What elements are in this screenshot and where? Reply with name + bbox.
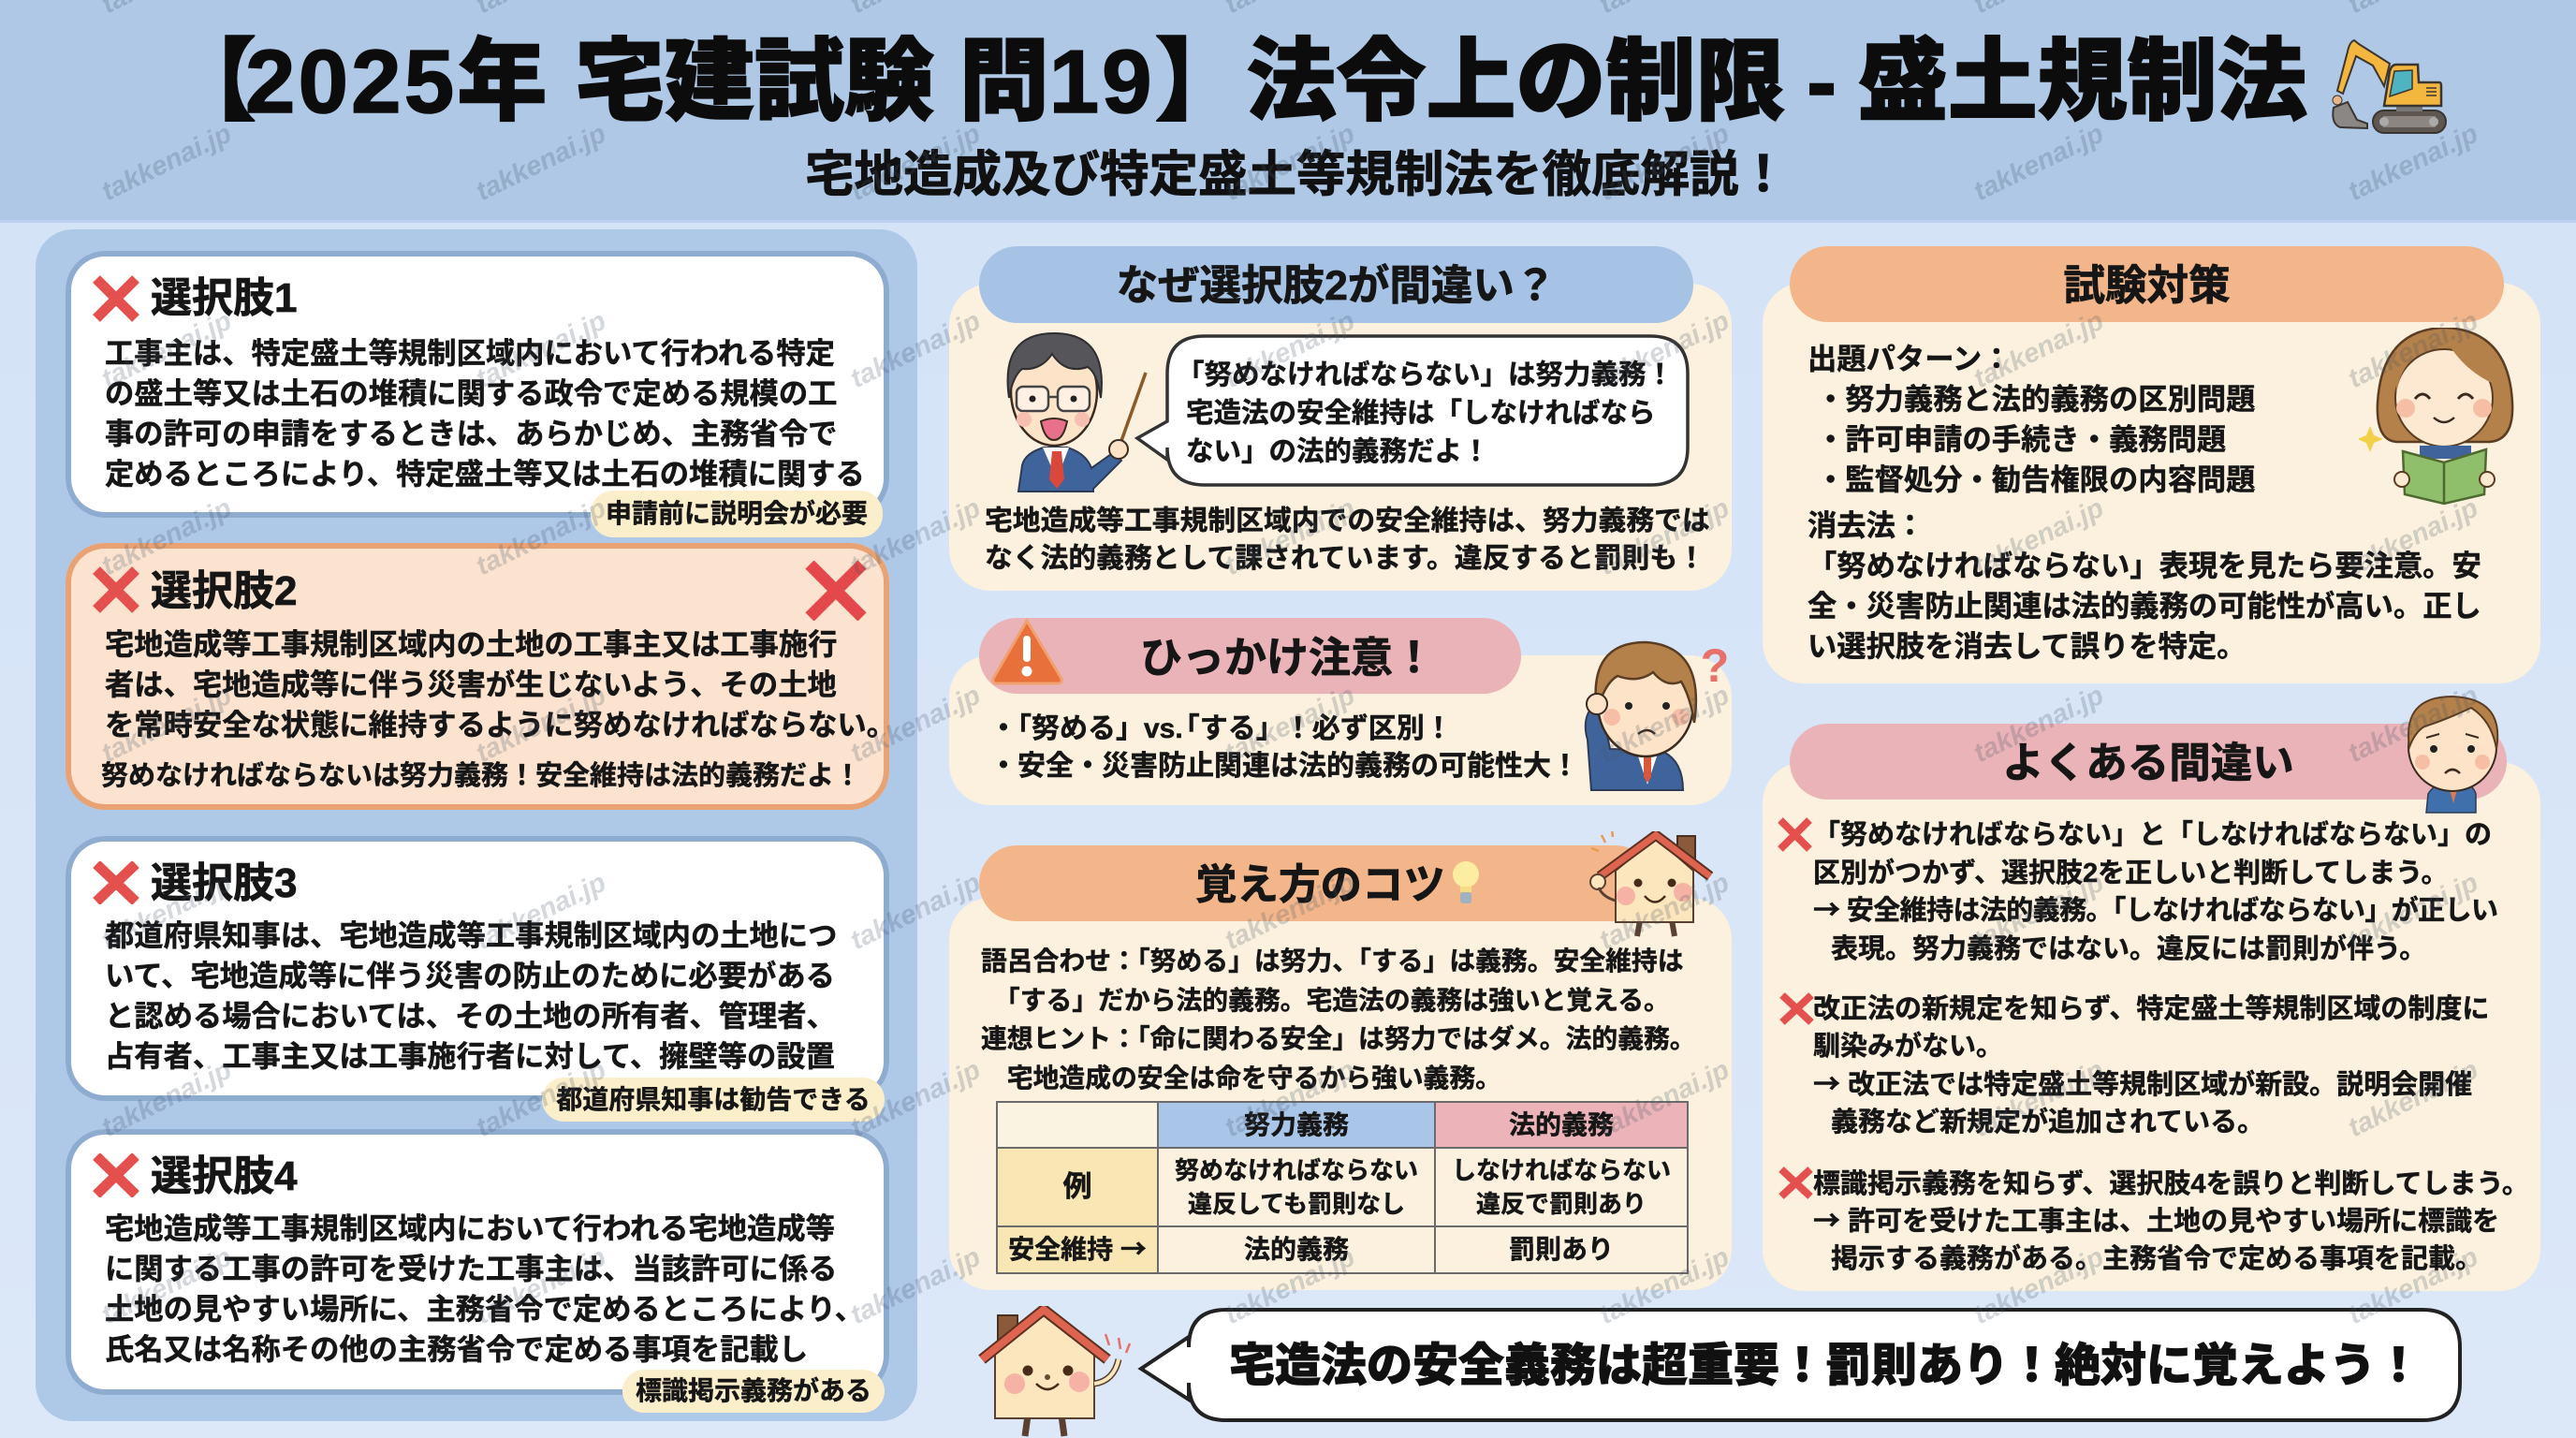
watermarks: takkenai.jp	[472, 1055, 610, 1143]
tag: choice 4: 標識掲示義務がある	[636, 1376, 871, 1405]
watermarks: takkenai.jp	[97, 493, 236, 581]
text: choice 3: と認める場合においては、その土地の所有者、管理者、	[105, 1000, 836, 1032]
heading: strategy: 試験対策	[2063, 263, 2230, 309]
title: 【2025年 宅建試験 問19】法令上の制限 - 盛土規制法	[167, 32, 2307, 132]
icon: excavator	[2332, 39, 2447, 134]
watermarks: takkenai.jp	[1221, 868, 1359, 956]
text: choice 2: 宅地造成等工事規制区域内の土地の工事主又は工事施行	[105, 627, 837, 661]
text: choice 1: 定めるところにより、特定盛土等又は土石の堆積に関する	[105, 457, 865, 491]
text: key message: 宅造法の安全義務は超重要！罰則あり！絶対に覚えよう！	[1229, 1341, 2422, 1391]
icon: house mascot pointing	[977, 1306, 1133, 1438]
watermarks: takkenai.jp	[472, 306, 610, 394]
text: elimination method: 「努めなければならない」表現を見たら要注意。安	[1808, 549, 2481, 582]
text: speech	[1186, 356, 1674, 471]
text: question patterns	[1808, 339, 2255, 500]
watermarks: takkenai.jp	[1969, 1055, 2108, 1143]
panel: common mistakes	[1763, 695, 2540, 1291]
text: mistake 1: 区別がつかず、選択肢2を正しいと判断してしまう。	[1813, 858, 2449, 888]
text: choice 3	[105, 916, 837, 1077]
text: elimination method	[1808, 506, 2481, 667]
table: duty comparison: 努力義務	[1244, 1110, 1349, 1138]
heading: choice 2: 選択肢2	[151, 568, 297, 614]
icon: warning	[989, 617, 1065, 685]
text: tips	[981, 942, 1696, 1097]
watermarks: takkenai.jp	[846, 1242, 985, 1330]
text: elimination method: 全・災害防止関連は法的義務の可能性が高い。正し	[1808, 590, 2481, 622]
table: duty comparison: 努めなければならない	[1175, 1156, 1418, 1184]
text: choice 3: 都道府県知事は、宅地造成等工事規制区域内の土地につ	[105, 919, 837, 951]
watermarks: takkenai.jp	[472, 119, 610, 207]
text: tips: 連想ヒント：「命に関わる安全」は努力ではダメ。法的義務。	[981, 1024, 1696, 1053]
text: explanation: なく法的義務として課されています。違反すると罰則も！	[985, 543, 1705, 574]
text: mistake 1: → 安全維持は法的義務。「しなければならない」が正しい	[1813, 888, 2497, 928]
table: duty comparison: 法的義務	[1509, 1110, 1614, 1138]
icon: teacher	[1002, 328, 1165, 496]
text: trap bullets: ・安全・災害防止関連は法的義務の可能性大！	[989, 751, 1579, 782]
text: speech: 「努めなければならない」は努力義務！	[1177, 360, 1674, 390]
watermarks: takkenai.jp	[97, 868, 236, 956]
text: speech: 宅造法の安全維持は「しなければなら	[1186, 398, 1656, 429]
icon: red cross	[93, 861, 139, 904]
tag: choice 3: 都道府県知事は勧告できる	[556, 1085, 871, 1114]
watermarks: takkenai.jp	[2344, 306, 2482, 394]
watermarks: takkenai.jp	[1221, 493, 1359, 581]
text: choice 3: 占有者、工事主又は工事施行者に対して、擁壁等の設置	[105, 1039, 835, 1073]
text: choice 4: 土地の見やすい場所に、主務省令で定めるところにより、	[105, 1292, 864, 1326]
icon: red cross	[93, 566, 139, 613]
tag: choice 1	[591, 491, 883, 537]
watermarks: takkenai.jp	[2344, 1242, 2482, 1330]
watermarks: takkenai.jp	[846, 1055, 985, 1143]
icon: confused student	[1578, 637, 1737, 792]
card: choice 3	[66, 836, 889, 1101]
watermarks: takkenai.jp	[472, 493, 610, 581]
watermarks: takkenai.jp	[846, 868, 985, 956]
heading bar: tips	[979, 845, 1653, 921]
watermarks: takkenai.jp	[97, 681, 236, 769]
text: choice 1: の盛土等又は土石の堆積に関する政令で定める規模の工	[105, 376, 837, 410]
heading: choice 4: 選択肢4	[151, 1153, 297, 1199]
watermarks: takkenai.jp	[1595, 868, 1734, 956]
tag: choice 3	[542, 1078, 885, 1122]
heading: choice 3: 選択肢3	[151, 860, 297, 906]
text: mistake 3: 掲示する義務がある。主務省令で定める事項を記載。	[1831, 1244, 2482, 1274]
watermarks: takkenai.jp	[1969, 119, 2108, 207]
watermarks: takkenai.jp	[1595, 1242, 1734, 1330]
text: choice 1: 事の許可の申請をするときは、あらかじめ、主務省令で	[105, 418, 837, 449]
speech bubble: teacher	[1133, 333, 1694, 492]
text: question patterns: ・許可申請の手続き・義務問題	[1816, 423, 2226, 455]
heading: strategy	[1790, 246, 2504, 322]
icon: confused student: ?	[1701, 639, 1729, 692]
heading bar: trap	[979, 618, 1521, 694]
watermarks: takkenai.jp	[1969, 1242, 2108, 1330]
heading: why	[979, 246, 1693, 323]
watermarks: takkenai.jp	[2344, 681, 2482, 769]
icon: light bulb	[1452, 859, 1480, 906]
watermarks: takkenai.jp	[97, 306, 236, 394]
note: choice 2: 努めなければならないは努力義務！安全維持は法的義務だよ！	[101, 761, 861, 791]
heading: mistakes	[1790, 724, 2507, 800]
table: duty comparison: 罰則あり	[1509, 1235, 1614, 1264]
table: duty comparison: 違反しても罰則なし	[1188, 1190, 1405, 1218]
table: duty comparison: 安全維持 →	[1008, 1229, 1147, 1267]
text: choice 1: 工事主は、特定盛土等規制区域内において行われる特定	[105, 337, 835, 369]
watermarks: takkenai.jp	[472, 868, 610, 956]
heading: choice 1: 選択肢1	[151, 275, 297, 321]
watermarks: takkenai.jp	[1595, 119, 1734, 207]
text: choice 4: 氏名又は名称その他の主務省令で定める事項を記載し	[105, 1333, 808, 1365]
icon: house mascot waving	[1589, 831, 1713, 939]
watermarks: takkenai.jp	[1595, 306, 1734, 394]
text: question patterns: 出題パターン：	[1808, 343, 2012, 374]
text: choice 2: を常時安全な状態に維持するように努めなければならない。	[105, 708, 896, 741]
text: elimination method: い選択肢を消去して誤りを特定。	[1808, 629, 2247, 663]
icon: red cross	[1779, 992, 1814, 1025]
text: choice 4	[105, 1208, 864, 1369]
heading text: trap: ひっかけ注意！	[1140, 634, 1435, 682]
watermarks: takkenai.jp	[2344, 119, 2482, 207]
text: mistake 3: 標識掲示義務を知らず、選択肢4を誤りと判断してしまう。	[1813, 1169, 2529, 1199]
callout: key message	[1137, 1308, 2462, 1423]
watermarks: takkenai.jp	[97, 1242, 236, 1330]
panel: memory tips	[949, 833, 1732, 1290]
text: trap bullets	[989, 711, 1579, 785]
text: tips: 「する」だから法的義務。宅造法の義務は強いと覚える。	[1007, 985, 1670, 1015]
panel: exam strategy	[1763, 246, 2540, 683]
text: choice 3: いて、宅地造成等に伴う災害の防止のために必要がある	[105, 959, 835, 992]
panel: choices	[36, 229, 917, 1421]
watermarks: takkenai.jp	[97, 1055, 236, 1143]
watermarks: takkenai.jp	[846, 493, 985, 581]
table: duty comparison: 違反で罰則あり	[1476, 1190, 1647, 1218]
watermarks: takkenai.jp	[846, 681, 985, 769]
card: choice 2	[66, 543, 889, 810]
table: duty comparison	[996, 1101, 1689, 1274]
text: explanation: 宅地造成等工事規制区域内での安全維持は、努力義務では	[985, 506, 1710, 536]
text: speech: ない」の法的義務だよ！	[1186, 436, 1490, 467]
text: trap bullets: ・「努める」vs.「する」！必ず区別！	[989, 713, 1453, 744]
watermarks: takkenai.jp	[1969, 493, 2108, 581]
header band	[0, 0, 2576, 223]
icon: red cross	[1778, 1167, 1813, 1199]
text: choice 4: 宅地造成等工事規制区域内において行われる宅地造成等	[105, 1211, 835, 1245]
table: duty comparison: 例	[1063, 1170, 1091, 1203]
heading text: tips: 覚え方のコツ	[1195, 862, 1445, 908]
text: tips: 語呂合わせ：「努める」は努力、「する」は義務。安全維持は	[981, 946, 1684, 976]
text: mistake 1	[1813, 816, 2497, 968]
text: choice 2: 者は、宅地造成等に伴う災害が生じないよう、その土地	[105, 668, 837, 700]
text: mistake 2	[1813, 990, 2489, 1141]
text: choice 2	[105, 627, 896, 741]
watermarks: takkenai.jp	[1595, 493, 1734, 581]
watermarks: takkenai.jp	[97, 119, 236, 207]
subtitle: 宅地造成及び特定盛土等規制法を徹底解説！	[805, 147, 1788, 202]
heading: mistakes: よくある間違い	[2002, 741, 2294, 786]
text: mistake 1: 「努めなければならない」と「しなければならない」の	[1813, 820, 2492, 850]
table: duty comparison: 法的義務	[1244, 1235, 1349, 1264]
icon: red cross	[93, 275, 139, 322]
text: choice 1	[105, 337, 865, 491]
watermarks: takkenai.jp	[472, 681, 610, 769]
text: mistake 3: → 許可を受けた工事主は、土地の見やすい場所に標識を	[1813, 1199, 2499, 1239]
table: duty comparison: しなければならない	[1452, 1156, 1671, 1184]
text: mistake 2: 義務など新規定が追加されている。	[1831, 1108, 2264, 1137]
panel: why choice 2 is wrong	[949, 246, 1732, 591]
watermarks: takkenai.jp	[1969, 306, 2108, 394]
text: choice 4: に関する工事の許可を受けた工事主は、当該許可に係る	[105, 1253, 837, 1284]
watermarks: takkenai.jp	[1969, 868, 2108, 956]
heading: why: なぜ選択肢2が間違い？	[1117, 263, 1556, 309]
icon: red cross	[1778, 817, 1812, 852]
text: question patterns: ・努力義務と法的義務の区別問題	[1816, 382, 2255, 416]
watermarks: takkenai.jp	[472, 1242, 610, 1330]
text: explanation	[985, 503, 1710, 578]
watermarks: takkenai.jp	[1595, 681, 1734, 769]
watermarks: takkenai.jp	[846, 119, 985, 207]
watermarks: takkenai.jp	[846, 306, 985, 394]
icon: red cross	[93, 1153, 139, 1197]
text: mistake 3	[1813, 1166, 2529, 1278]
watermarks: takkenai.jp	[1221, 681, 1359, 769]
text: question patterns: ・監督処分・勧告権限の内容問題	[1816, 462, 2255, 496]
tag: choice 4	[622, 1370, 885, 1413]
watermarks: takkenai.jp	[2344, 1055, 2482, 1143]
watermarks: takkenai.jp	[1221, 1055, 1359, 1143]
watermarks: takkenai.jp	[1595, 1055, 1734, 1143]
icon: woman reading	[2359, 328, 2518, 507]
icon: worried student	[2404, 695, 2501, 814]
text: tips: 宅地造成の安全は命を守るから強い義務。	[1007, 1064, 1501, 1092]
watermarks: takkenai.jp	[1221, 306, 1359, 394]
watermarks: takkenai.jp	[1969, 681, 2108, 769]
tag: choice 1: 申請前に説明会が必要	[606, 499, 868, 528]
card: choice 1	[66, 251, 889, 518]
watermarks: takkenai.jp	[1221, 119, 1359, 207]
watermarks: takkenai.jp	[1221, 1242, 1359, 1330]
icon: big red cross	[805, 561, 867, 621]
text: mistake 2: 馴染みがない。	[1813, 1032, 2003, 1062]
text: mistake 2: 改正法の新規定を知らず、特定盛土等規制区域の制度に	[1813, 994, 2489, 1024]
card: choice 4	[66, 1129, 889, 1395]
watermarks: takkenai.jp	[2344, 868, 2482, 956]
text: elimination method: 消去法：	[1808, 509, 1925, 541]
watermarks: takkenai.jp	[2344, 493, 2482, 581]
text: mistake 2: → 改正法では特定盛土等規制区域が新設。説明会開催	[1813, 1063, 2472, 1102]
text: mistake 1: 表現。努力義務ではない。違反には罰則が伴う。	[1831, 934, 2426, 964]
panel: trap warning	[949, 617, 1732, 805]
